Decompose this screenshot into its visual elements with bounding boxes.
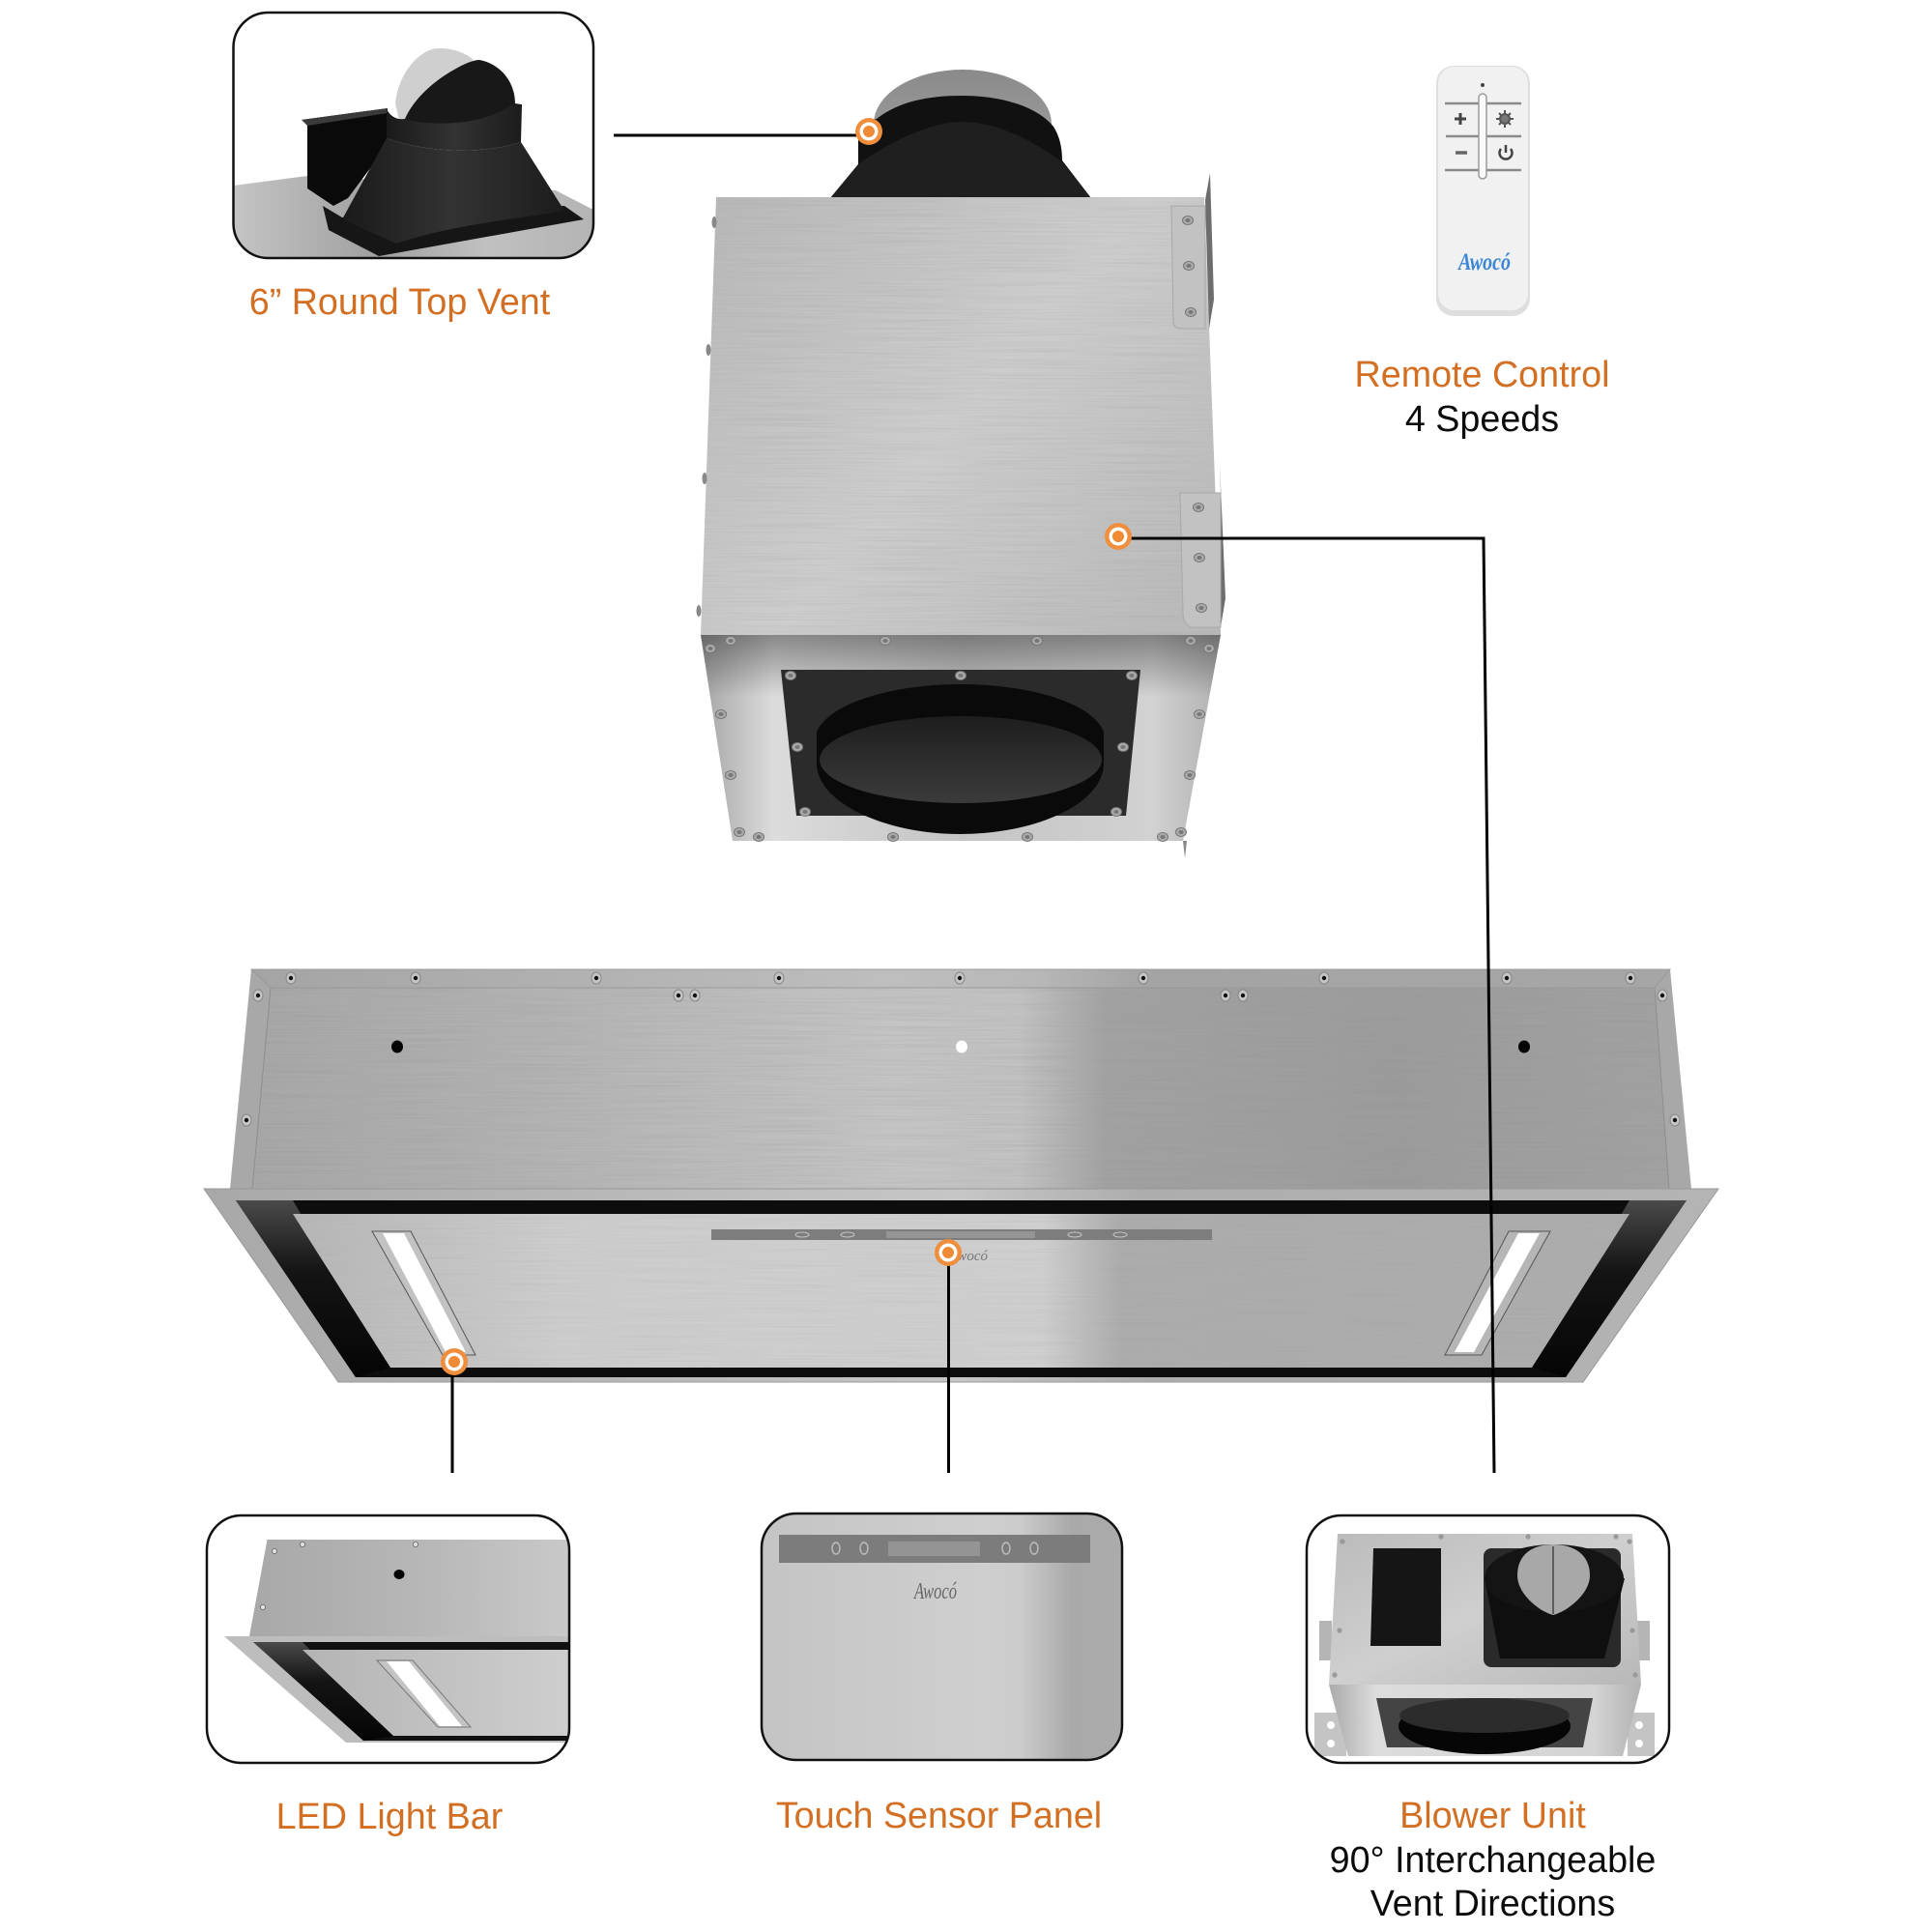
- callout line: blower unit: [1126, 538, 1494, 1473]
- panel: touch sensor panel: [762, 1514, 1122, 1760]
- callout line: LED light bar: [450, 1372, 454, 1473]
- remote control: [1436, 66, 1530, 316]
- touch control bar: [711, 1229, 1212, 1240]
- label: blower unit: Blower Unit: [1399, 1795, 1586, 1835]
- label: 4 speeds: 4 Speeds: [1405, 398, 1559, 439]
- top face: [701, 197, 1221, 635]
- panel: touch sensor panel: Awocó: [913, 1579, 957, 1604]
- rivets: [242, 972, 1680, 1126]
- front duct opening: [817, 684, 1104, 834]
- back box: [230, 969, 1691, 1189]
- text: 90 degree interchangeable: 90° Interchangeable: [1330, 1839, 1656, 1880]
- front plate: [781, 670, 1140, 816]
- marker: blower unit: [1105, 523, 1132, 550]
- front face: [701, 635, 1221, 841]
- black recess: [236, 1200, 1687, 1377]
- LED light left: [372, 1231, 476, 1355]
- label: touch sensor panel: Touch Sensor Panel: [776, 1795, 1102, 1835]
- icon: minus: [1456, 151, 1467, 155]
- panel logo: Awocó: [948, 1249, 988, 1264]
- steel panel: [293, 1214, 1629, 1368]
- callout line: top vent: [614, 133, 860, 137]
- duct collar and flare: [830, 96, 1091, 198]
- mounting bracket upper: [1171, 173, 1214, 329]
- icon: power: [1500, 145, 1512, 159]
- range hood main illustration: [204, 969, 1718, 1382]
- panel: blower unit: [1307, 1515, 1669, 1763]
- icon: light: [1496, 110, 1514, 128]
- panel: 6 inch round top vent: [234, 13, 593, 258]
- label: LED light bar: LED Light Bar: [276, 1796, 503, 1836]
- LED light right: [1445, 1231, 1550, 1355]
- left edge rivets: [696, 216, 717, 617]
- panel: LED light bar: [207, 1515, 580, 1763]
- marker: touch sensor panel: [935, 1239, 962, 1266]
- blower unit main illustration: [696, 70, 1226, 858]
- icon: plus: [1455, 113, 1466, 125]
- trim flange: [204, 1189, 1718, 1382]
- mounting holes: [391, 1040, 1530, 1053]
- callout line: touch sensor panel: [947, 1261, 950, 1473]
- marker: LED light bar: [441, 1348, 468, 1375]
- label: remote control: Remote Control: [1355, 354, 1609, 394]
- mounting bracket lower: [1180, 462, 1226, 627]
- duct dome: [874, 70, 1052, 178]
- marker: top vent: [855, 118, 882, 145]
- remote logo: Awocó: [1456, 249, 1511, 275]
- rivets: [706, 636, 1214, 841]
- text: vent directions: Vent Directions: [1370, 1883, 1615, 1923]
- label: 6 inch round top vent: 6” Round Top Vent: [249, 281, 551, 322]
